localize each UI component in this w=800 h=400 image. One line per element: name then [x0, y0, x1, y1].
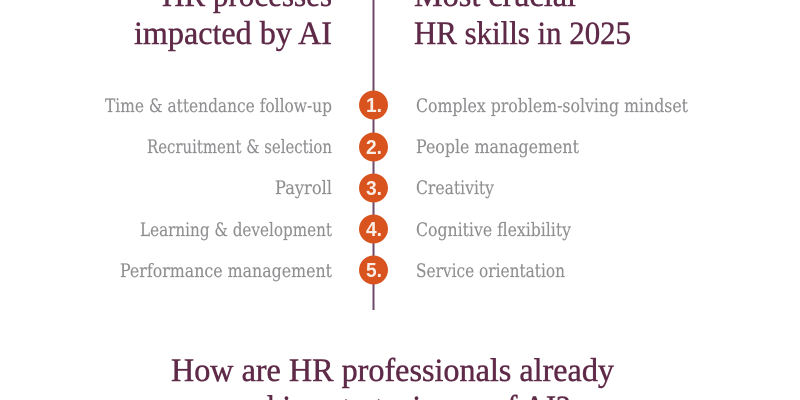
list: crucial HR skills — [416, 96, 688, 282]
timeline line — [372, 0, 374, 310]
heading: Most crucial HR skills in 2025: HR skills in 2025 — [414, 16, 631, 52]
list: impacted HR processes: Payroll — [275, 178, 332, 199]
numbered badges — [359, 90, 388, 284]
list: impacted HR processes: Recruitment & selection — [147, 137, 332, 158]
list: impacted HR processes — [105, 96, 332, 282]
list: crucial HR skills: Service orientation — [416, 261, 565, 282]
heading: HR processes impacted by AI — [134, 0, 332, 52]
list: crucial HR skills: Creativity — [416, 178, 494, 199]
list: crucial HR skills: Cognitive flexibility — [416, 220, 571, 241]
badge 2: 2. — [366, 137, 382, 159]
heading: HR processes impacted by AI: impacted by AI — [134, 16, 332, 52]
badge 3 — [359, 174, 388, 202]
badge 4: 4. — [366, 219, 382, 241]
list: impacted HR processes: Time & attendance follow-up — [105, 96, 332, 117]
badge 4 — [359, 214, 388, 244]
list: impacted HR processes: Learning & development — [140, 220, 332, 241]
badge 2 — [359, 132, 388, 162]
badge 3: 3. — [366, 178, 382, 200]
list: crucial HR skills: Complex problem-solving mindset — [416, 96, 688, 117]
bottom heading: How are HR professionals already — [171, 353, 614, 389]
badge 1 — [359, 90, 388, 120]
heading: Most crucial HR skills in 2025 — [414, 0, 631, 52]
badge 5: 5. — [366, 260, 382, 282]
badge 1: 1. — [366, 95, 382, 117]
list: crucial HR skills: People management — [416, 137, 579, 158]
badge 5 — [359, 256, 388, 284]
list: impacted HR processes: Performance management — [120, 261, 332, 282]
